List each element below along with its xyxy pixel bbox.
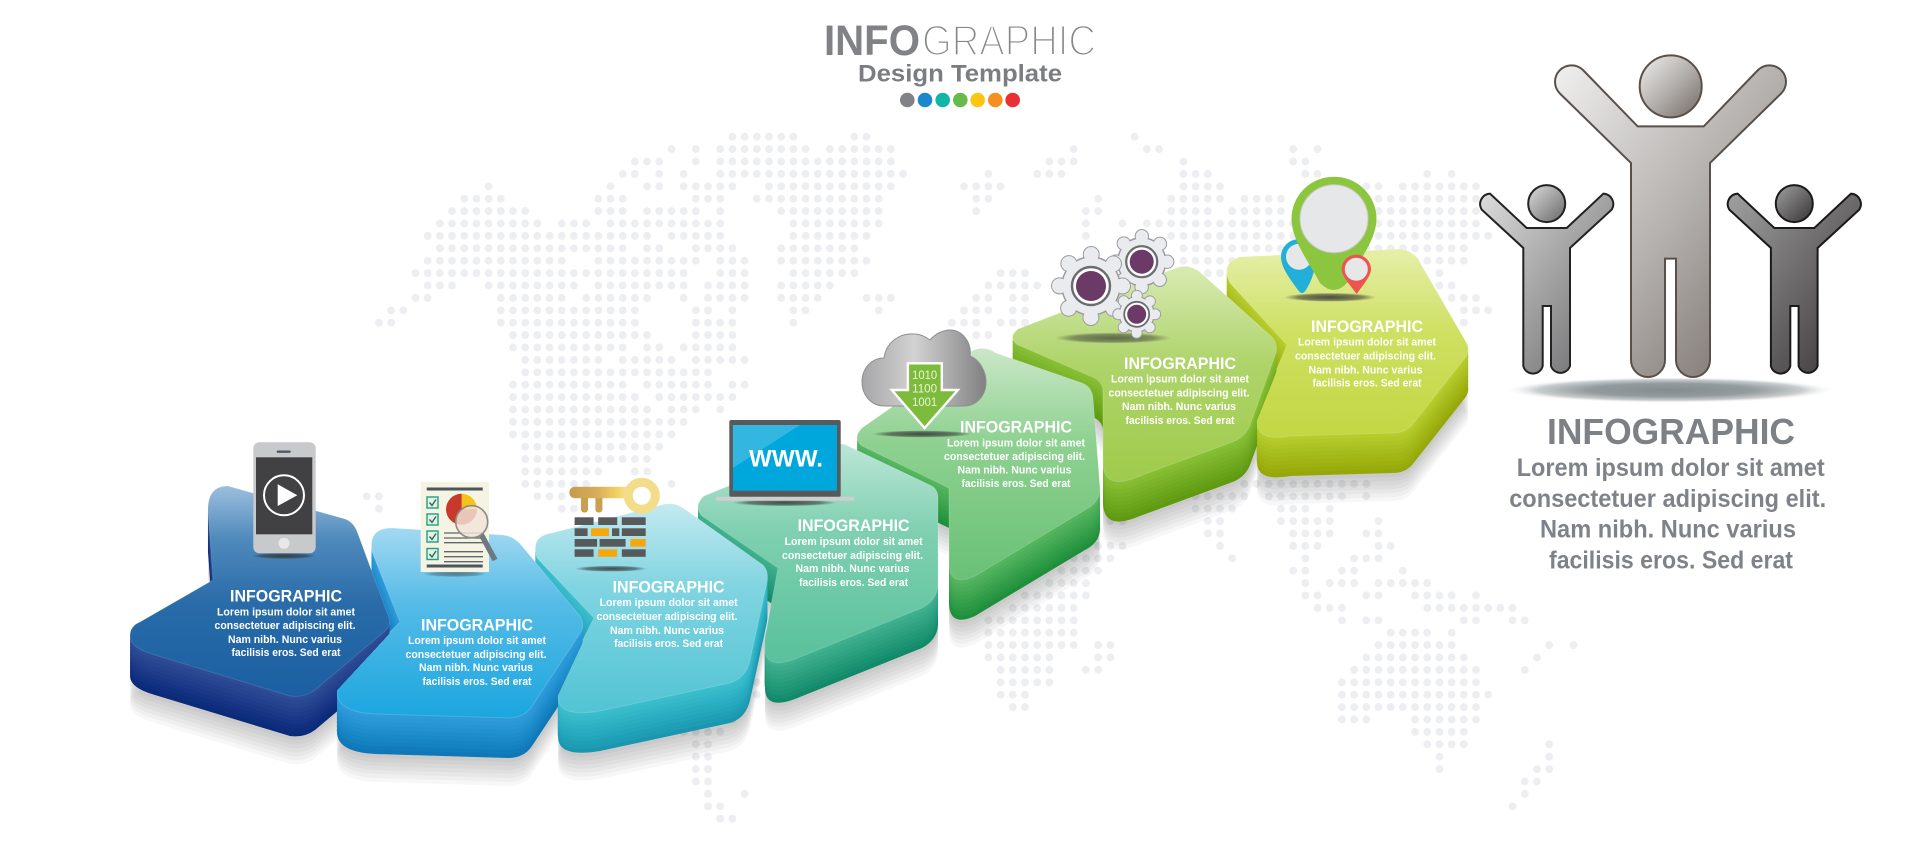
icon: cloud download with binary: 1010 <box>912 368 937 382</box>
icon: three people with raised arms <box>1480 55 1861 403</box>
body text: consectetuer adipiscing elit. <box>782 550 923 562</box>
body text: Lorem ipsum dolor sit amet <box>217 606 355 618</box>
body text <box>782 536 923 589</box>
title: INFO <box>824 17 920 65</box>
panel: step 5 green <box>857 348 1100 620</box>
top face <box>130 486 390 696</box>
panel: step 6 light green <box>1012 266 1276 522</box>
body text: Lorem ipsum dolor sit amet <box>1298 337 1436 349</box>
panel: step 4 sea green <box>698 443 938 703</box>
body text: Nam nibh. Nunc varius <box>228 634 342 646</box>
top face <box>698 443 938 663</box>
body text: facilisis eros. Sed erat <box>422 676 532 688</box>
icon: cloud download with binary: 1100 <box>912 382 937 396</box>
icon: report with magnifier <box>421 482 495 577</box>
icon: smartphone with play button <box>252 442 316 559</box>
summary heading: INFOGRAPHIC <box>1547 411 1795 452</box>
summary text <box>1509 454 1826 575</box>
body text <box>214 606 356 659</box>
body text: consectetuer adipiscing elit. <box>406 649 546 661</box>
panel: step 1 dark blue <box>130 486 390 736</box>
body text: Nam nibh. Nunc varius <box>610 625 724 637</box>
body text <box>596 597 738 650</box>
summary text: Nam nibh. Nunc varius <box>1540 516 1796 544</box>
drop shadows under steps <box>130 293 1468 786</box>
icon: laptop with www: WWW. <box>749 446 823 473</box>
heading: INFOGRAPHIC <box>1124 354 1236 373</box>
icon: cloud download with binary: 1001 <box>912 395 937 409</box>
icon: cloud download with binary <box>862 330 986 438</box>
body text: facilisis eros. Sed erat <box>962 478 1071 490</box>
body text: consectetuer adipiscing elit. <box>596 611 738 623</box>
summary text: consectetuer adipiscing elit. <box>1509 485 1826 513</box>
body text: Nam nibh. Nunc varius <box>1308 364 1422 376</box>
side wall <box>1012 339 1276 522</box>
colour dots <box>900 93 1020 107</box>
body text: Lorem ipsum dolor sit amet <box>600 597 738 609</box>
icon: key over brick wall <box>569 482 655 572</box>
side wall <box>130 490 390 736</box>
body text: facilisis eros. Sed erat <box>799 577 908 589</box>
ground shadow <box>1504 377 1836 403</box>
icon: map pins <box>1281 177 1376 302</box>
body text: Nam nibh. Nunc varius <box>796 563 910 575</box>
title <box>824 17 1096 65</box>
top face <box>1012 266 1276 482</box>
person left <box>1480 185 1613 374</box>
background dotted world map <box>367 137 1574 819</box>
panel: step 2 sky blue <box>337 528 583 758</box>
body text: facilisis eros. Sed erat <box>1312 378 1422 390</box>
top face <box>535 504 768 713</box>
body text: Lorem ipsum dolor sit amet <box>1111 374 1249 386</box>
icon: three gears <box>1055 236 1171 344</box>
heading: INFOGRAPHIC <box>613 578 725 597</box>
side wall <box>337 532 583 758</box>
panel: step 3 aqua <box>535 504 768 753</box>
body text: facilisis eros. Sed erat <box>1126 415 1235 427</box>
summary text: facilisis eros. Sed erat <box>1549 547 1794 575</box>
body text: consectetuer adipiscing elit. <box>944 451 1085 463</box>
top face <box>857 348 1100 580</box>
summary text: Lorem ipsum dolor sit amet <box>1517 454 1825 482</box>
side wall <box>698 508 938 703</box>
side wall <box>857 439 1100 620</box>
heading: INFOGRAPHIC <box>230 587 342 606</box>
top face <box>337 528 583 718</box>
icon: laptop with www <box>716 420 854 506</box>
body text: Nam nibh. Nunc varius <box>958 465 1072 477</box>
person center <box>1555 55 1786 377</box>
subtitle: Design Template <box>858 60 1062 88</box>
top face <box>1227 249 1468 437</box>
body text: Lorem ipsum dolor sit amet <box>947 438 1085 450</box>
person right <box>1728 185 1861 374</box>
body text <box>406 635 546 688</box>
body text: consectetuer adipiscing elit. <box>1108 388 1250 400</box>
heading: INFOGRAPHIC <box>421 616 533 635</box>
body text <box>1295 337 1436 390</box>
body text: facilisis eros. Sed erat <box>614 638 723 650</box>
heading: INFOGRAPHIC <box>798 516 910 535</box>
panel: step 7 lime <box>1227 249 1468 477</box>
body text: consectetuer adipiscing elit. <box>1295 350 1436 362</box>
body text: consectetuer adipiscing elit. <box>214 620 356 632</box>
title: GRAPHIC <box>922 17 1096 65</box>
side wall <box>535 550 768 753</box>
body text: Lorem ipsum dolor sit amet <box>785 536 923 548</box>
body text: facilisis eros. Sed erat <box>232 647 341 659</box>
body text <box>944 438 1085 490</box>
body text: Lorem ipsum dolor sit amet <box>408 635 546 647</box>
body text: Nam nibh. Nunc varius <box>1122 401 1236 413</box>
heading: INFOGRAPHIC <box>1311 317 1423 336</box>
body text: Nam nibh. Nunc varius <box>419 662 533 674</box>
side wall <box>1227 253 1468 477</box>
heading: INFOGRAPHIC <box>960 418 1072 437</box>
body text <box>1108 374 1250 427</box>
